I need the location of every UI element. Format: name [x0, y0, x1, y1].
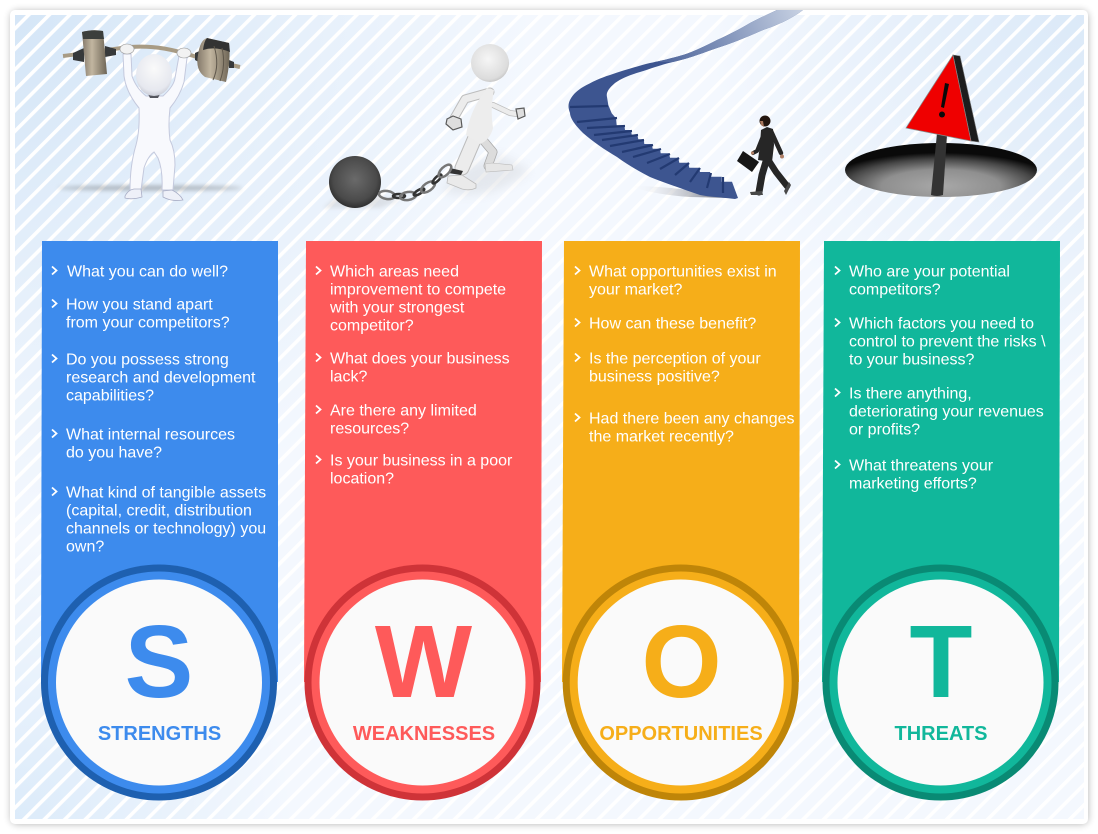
text: opportunities questions: business positive?	[589, 368, 720, 386]
text: strengths questions: research and development	[66, 370, 256, 386]
text: threats questions: Is there anything,	[849, 386, 972, 402]
badge: opportunities	[563, 564, 799, 800]
text: threats questions: control to prevent the risks \	[849, 334, 1046, 350]
bullets: weaknesses	[316, 266, 320, 464]
icon: figure with ball and chain	[323, 44, 530, 208]
text: threats questions	[849, 264, 1046, 492]
badge: weaknesses: WEAKNESSES	[353, 723, 495, 745]
text: strengths questions: from your competitors?	[66, 314, 230, 332]
text: threats questions: Which factors you need to	[849, 316, 1034, 332]
text: strengths questions: What kind of tangible assets	[66, 484, 266, 502]
badge: threats: T	[910, 604, 972, 719]
badge: weaknesses: W	[375, 604, 473, 719]
icon: warning sign in hole	[845, 55, 1037, 197]
ribbon: threats	[822, 241, 1060, 682]
text: opportunities questions: Had there been any changes	[589, 410, 794, 428]
text: strengths questions: own?	[66, 538, 104, 556]
bullets: opportunities	[575, 266, 580, 422]
text: opportunities questions: the market recently?	[589, 428, 734, 446]
panel: strengths	[41, 241, 278, 800]
text: strengths questions: Do you possess strong	[66, 352, 229, 368]
text: strengths questions: capabilities?	[66, 388, 154, 404]
text: weaknesses questions: location?	[330, 470, 394, 488]
text: weaknesses questions: improvement to compete	[330, 282, 506, 298]
bullets: threats	[835, 266, 840, 468]
text: strengths questions: What you can do well?	[67, 264, 228, 280]
badge: strengths	[41, 564, 277, 800]
text: weaknesses questions: What does your business	[330, 350, 510, 368]
text: strengths questions: How you stand apart	[66, 296, 213, 314]
badge: opportunities: O	[641, 604, 722, 719]
text: threats questions: to your business?	[849, 352, 975, 368]
ribbon: strengths	[41, 241, 278, 682]
text: weaknesses questions: with your strongest	[329, 300, 465, 316]
badge: threats	[822, 564, 1058, 800]
text: opportunities questions	[589, 264, 794, 446]
panel: weaknesses	[304, 241, 542, 800]
text: weaknesses questions: lack?	[330, 368, 367, 386]
badge: opportunities: OPPORTUNITIES	[599, 723, 763, 745]
text: strengths questions: channels or technology) you	[66, 520, 266, 538]
ribbon: opportunities	[562, 241, 800, 682]
text: threats questions: Who are your potential	[849, 264, 1010, 280]
badge: weaknesses	[304, 564, 540, 800]
text: weaknesses questions: competitor?	[330, 318, 414, 334]
text: threats questions: deteriorating your revenues	[849, 404, 1044, 420]
panel: threats	[822, 241, 1060, 800]
text: threats questions: What threatens your	[849, 458, 994, 474]
icon: weightlifter	[58, 30, 242, 201]
ribbon: weaknesses	[304, 241, 542, 682]
text: strengths questions: do you have?	[66, 444, 162, 462]
text: strengths questions	[66, 264, 266, 556]
badge: strengths: STRENGTHS	[98, 723, 221, 745]
text: strengths questions: What internal resources	[66, 426, 235, 444]
text: threats questions: competitors?	[849, 282, 941, 298]
text: weaknesses questions	[329, 264, 513, 488]
text: opportunities questions: your market?	[589, 282, 682, 298]
text: opportunities questions: What opportunities exist in	[589, 264, 777, 280]
text: opportunities questions: Is the perception of your	[589, 350, 761, 368]
text: weaknesses questions: resources?	[330, 420, 409, 438]
bullets: strengths	[52, 266, 56, 496]
panel: opportunities	[562, 241, 800, 800]
badge: strengths: S	[125, 604, 193, 719]
text: weaknesses questions: Are there any limited	[330, 402, 477, 420]
icon: spiral staircase	[568, 10, 803, 199]
text: strengths questions: (capital, credit, distribution	[66, 502, 252, 520]
text: threats questions: or profits?	[849, 422, 920, 438]
text: weaknesses questions: Which areas need	[330, 264, 459, 280]
text: opportunities questions: How can these benefit?	[589, 316, 756, 332]
text: threats questions: marketing efforts?	[849, 476, 977, 492]
icon: businessman with briefcase	[737, 116, 791, 195]
badge: threats: THREATS	[895, 723, 987, 745]
text: weaknesses questions: Is your business in a poor	[330, 452, 513, 470]
